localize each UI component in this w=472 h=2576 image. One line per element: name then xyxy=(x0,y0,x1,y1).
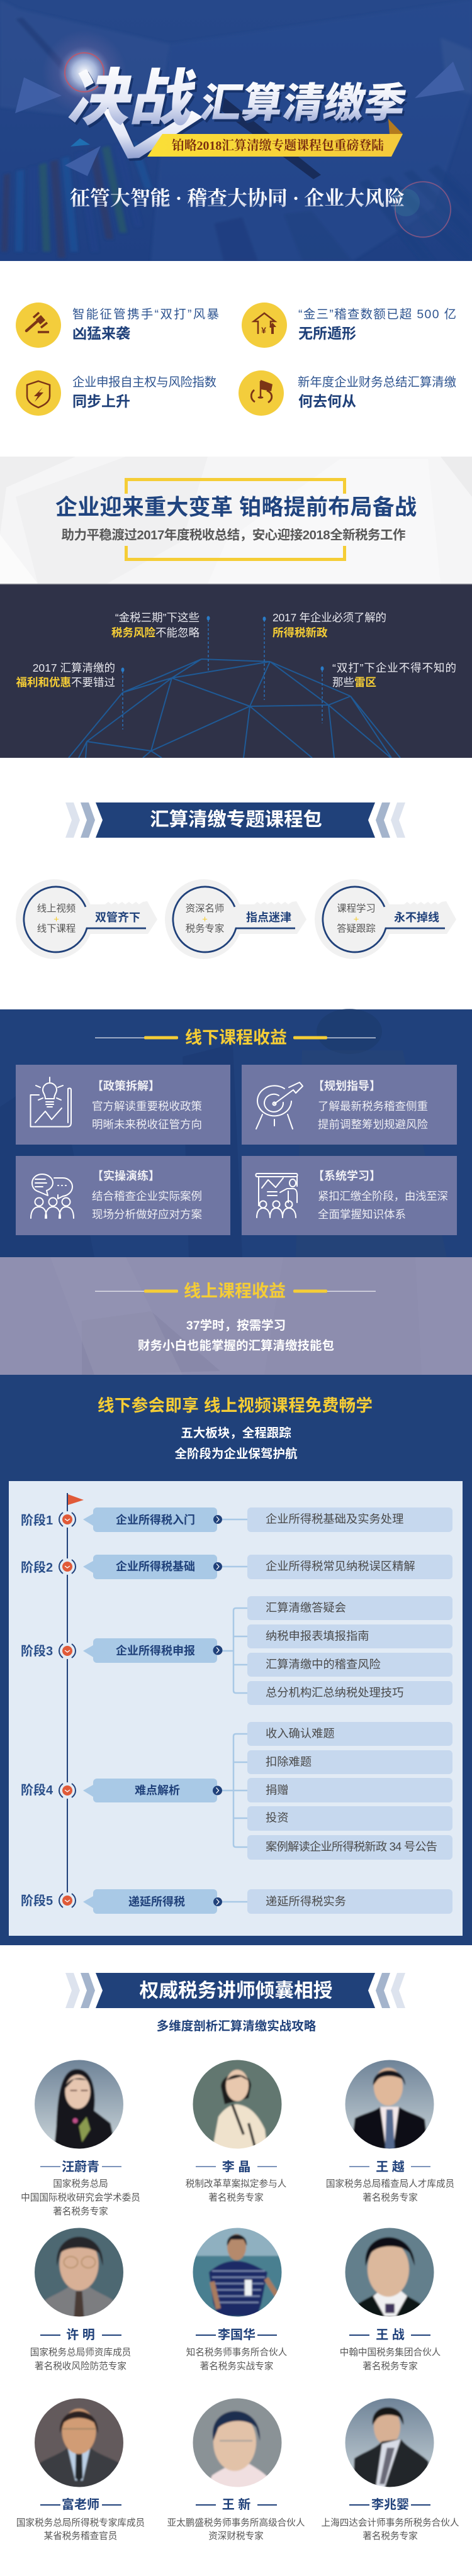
name: 李国华: 李国华 xyxy=(218,2328,256,2342)
lecturer: 富老师 xyxy=(16,2396,145,2541)
lecturer: 王战: 中翰中国税务集团合伙人 xyxy=(340,2347,441,2358)
panel: online course benefits: 财务小白也能掌握的汇算清缴技能包 xyxy=(138,1338,334,1353)
portrait xyxy=(193,2060,282,2148)
ribbon subtitle: 铂略2018汇算清缴专题课程包重磅登陆 xyxy=(172,138,384,153)
timeline xyxy=(67,1493,84,1894)
stage 3 xyxy=(21,1596,452,1705)
key: online and offline: 线上视频 xyxy=(37,903,76,914)
lecturer: 王战: 著名税务专家 xyxy=(362,2361,418,2372)
icon: target xyxy=(256,1082,303,1129)
name: 许明 xyxy=(40,2328,121,2342)
callout: golden tax risks: “金税三期”下这些 xyxy=(115,611,199,624)
callout: benefits xyxy=(16,662,125,730)
decorative triangles xyxy=(415,62,464,98)
hero tagline: 征管大智能 · 稽查大协同 · 企业大风险 xyxy=(70,187,405,209)
heading: lecturers banner xyxy=(65,1973,405,2008)
name: 王越 xyxy=(349,2160,430,2174)
name: 汪蔚青 xyxy=(40,2160,121,2174)
panel: course package keys xyxy=(16,879,456,959)
lecturer: 李兆婴: 著名税务专家 xyxy=(362,2531,418,2541)
key: teachers and experts: 税务专家 xyxy=(186,923,224,935)
icon: discussion xyxy=(31,1174,74,1218)
key: study and support: 永不掉线 xyxy=(394,911,439,924)
curriculum heading: 全阶段为企业保驾护航 xyxy=(174,1446,298,1461)
callout: new policy xyxy=(263,611,386,700)
callout: golden tax risks xyxy=(111,611,210,671)
check mark stroke xyxy=(103,107,203,158)
card: practice: 【实操演练】 xyxy=(92,1169,160,1182)
heading: course package banner xyxy=(65,802,405,838)
heading: course package banner: 汇算清缴专题课程包 xyxy=(150,809,322,830)
name: 李国华 xyxy=(196,2328,277,2342)
lecturer: 汪蔚青: 国家税务总局 xyxy=(53,2179,108,2189)
lecturer: 王战 xyxy=(340,2225,441,2372)
stage 5: 递延所得税实务 xyxy=(266,1894,346,1908)
name: 王新 xyxy=(196,2497,277,2512)
key: teachers and experts: + xyxy=(202,914,208,924)
lecturer: 王越 xyxy=(326,2057,454,2203)
panel: lecturers xyxy=(16,2057,459,2541)
name: 汪蔚青: 汪蔚青 xyxy=(62,2160,99,2174)
lecturer: 汪蔚青: 著名税务专家 xyxy=(53,2206,108,2217)
stage 5 xyxy=(21,1889,452,1914)
panel: network dark section xyxy=(0,584,472,758)
lecturer: 李晶: 著名税务专家 xyxy=(208,2192,264,2203)
icon: rising arrow xyxy=(242,303,287,348)
ribbon subtitle xyxy=(147,119,403,157)
point: golden tax xyxy=(242,303,456,348)
stage 4: 扣除难题 xyxy=(266,1755,312,1768)
panel: major change statement: 企业迎来重大变革 铂略提前布局备战 xyxy=(55,496,417,519)
callout: new policy: 2017 年企业必须了解的 xyxy=(273,611,386,624)
stage 4: 案例解读企业所得税新政 34 号公告 xyxy=(266,1840,437,1853)
stage 3: 总分机构汇总纳税处理技巧 xyxy=(266,1685,403,1699)
name: 许明: 许 明 xyxy=(66,2328,95,2342)
panel: major change statement xyxy=(0,457,472,584)
icon: presentation xyxy=(256,1174,297,1218)
portrait xyxy=(193,2399,282,2487)
lecturer: 王越: 国家税务总局稽查局人才库成员 xyxy=(326,2179,454,2189)
callout: minefields xyxy=(321,662,456,723)
lecturer: 李国华 xyxy=(186,2225,288,2372)
card: planning: 了解最新税务稽查侧重 xyxy=(318,1100,428,1113)
node xyxy=(59,1892,76,1909)
card: planning: 【规划指导】 xyxy=(313,1079,381,1092)
stage 3: 纳税申报表填报指南 xyxy=(266,1629,369,1643)
lecturer: 李晶 xyxy=(186,2057,287,2203)
icon: rising arrow: ¥ xyxy=(261,325,266,335)
stage 3: 汇算清缴中的稽查风险 xyxy=(266,1658,381,1670)
lecturer: 王新: 亚太鹏盛税务师事务所高级合伙人 xyxy=(167,2518,305,2528)
lecturer: 李兆婴 xyxy=(322,2396,459,2541)
pen xyxy=(208,94,321,179)
point: new year summary: 新年度企业财务总结汇算清缴 xyxy=(298,375,456,389)
point: new year summary xyxy=(239,370,456,416)
lecturer: 李国华: 知名税务师事务所合伙人 xyxy=(186,2347,288,2358)
card: policy: 官方解读重要税收政策 xyxy=(92,1100,202,1113)
lecturer: 李兆婴: 上海四达会计师事务所税务合伙人 xyxy=(322,2518,459,2528)
lecturer: 李国华: 著名税务实战专家 xyxy=(200,2361,274,2372)
stage 5: 递延所得税 xyxy=(128,1895,185,1908)
panel: hero banner xyxy=(0,0,472,261)
panel: online course benefits xyxy=(0,1257,472,1375)
stage 2: 阶段2 xyxy=(21,1560,53,1575)
node xyxy=(59,1511,76,1528)
name: 王战 xyxy=(349,2328,430,2342)
curriculum heading xyxy=(98,1396,373,1461)
card: policy: 【政策拆解】 xyxy=(92,1080,160,1092)
callout: golden tax risks: 税务风险不能忽略 xyxy=(111,626,199,639)
card: planning: 提前调整筹划规避风险 xyxy=(318,1118,428,1131)
name: 王新: 王 新 xyxy=(222,2497,250,2512)
icon: gavel xyxy=(16,303,61,348)
lecturer: 富老师: 国家税务总局所得税专家库成员 xyxy=(16,2518,145,2528)
stage 1: 企业所得税基础及实务处理 xyxy=(266,1512,403,1526)
point: dual strike: 智能征管携手“双打”风暴 xyxy=(72,308,219,321)
lecturers subheading: 多维度剖析汇算清缴实战攻略 xyxy=(157,2019,317,2033)
node xyxy=(59,1782,76,1799)
card: system learning: 【系统学习】 xyxy=(313,1169,381,1182)
lecturer: 王新 xyxy=(167,2396,305,2541)
callout: benefits: 福利和优惠不要错过 xyxy=(16,676,115,689)
portrait xyxy=(345,2399,434,2487)
point: self declaration: 同步上升 xyxy=(72,393,130,409)
card: policy xyxy=(16,1065,230,1145)
node xyxy=(59,1643,76,1659)
stage 2 xyxy=(21,1555,452,1579)
heading: online benefits: 线上课程收益 xyxy=(184,1282,286,1301)
heading: online benefits xyxy=(95,1282,376,1301)
lecturer: 汪蔚青: 中国国际税收研究会学术委员 xyxy=(21,2192,140,2203)
point: new year summary: 何去何从 xyxy=(298,393,356,409)
key: study and support: + xyxy=(354,914,359,924)
point: self declaration: 企业申报自主权与风险指数 xyxy=(72,375,216,389)
name: 李晶: 李 晶 xyxy=(222,2160,250,2174)
icon: flag and arrows xyxy=(239,370,284,416)
lecturer: 许明: 国家税务总局师资库成员 xyxy=(30,2347,131,2358)
stage 4: 难点解析 xyxy=(135,1784,180,1797)
card: practice xyxy=(16,1156,230,1235)
stage 4 xyxy=(21,1722,452,1860)
key: study and support: 课程学习 xyxy=(337,903,376,914)
portrait xyxy=(35,2060,123,2148)
portrait xyxy=(35,2228,123,2317)
curriculum heading: 五大板块，全程跟踪 xyxy=(181,1426,291,1440)
stage 4: 捐赠 xyxy=(266,1784,289,1796)
stage 1 xyxy=(21,1507,452,1532)
panel: four key points xyxy=(16,303,456,416)
node xyxy=(59,1558,76,1575)
lens flare xyxy=(42,30,127,115)
point: dual strike xyxy=(16,303,219,348)
portrait xyxy=(35,2399,123,2487)
hero title: 汇算清缴季 xyxy=(198,80,410,126)
stage 2: 企业所得税基础 xyxy=(116,1560,195,1573)
stage 4: 投资 xyxy=(266,1811,289,1824)
portrait xyxy=(193,2228,282,2317)
name: 李兆婴: 李兆婴 xyxy=(371,2497,409,2512)
name: 李晶 xyxy=(196,2160,277,2174)
card: system learning xyxy=(242,1156,457,1235)
key: online and offline xyxy=(16,879,157,959)
network sphere xyxy=(69,659,400,758)
callout: benefits: 2017 汇算清缴的 xyxy=(33,662,115,674)
callout: minefields: 那些雷区 xyxy=(332,676,376,689)
point: dual strike: 凶猛来袭 xyxy=(72,325,130,341)
stage 3: 企业所得税申报 xyxy=(116,1644,195,1657)
lecturer: 许明 xyxy=(30,2225,131,2372)
key: study and support xyxy=(315,879,456,959)
point: golden tax: “金三”稽查数额已超 500 亿 xyxy=(298,308,456,321)
card: practice: 现场分析做好应对方案 xyxy=(92,1208,202,1221)
stage 3: 汇算清缴答疑会 xyxy=(266,1601,346,1614)
stage 3: 阶段3 xyxy=(21,1643,53,1658)
lecturer: 王越: 著名税务专家 xyxy=(362,2192,418,2203)
panel: online course benefits: 37学时，按需学习 xyxy=(186,1318,286,1333)
hero title xyxy=(64,64,410,158)
heading: offline benefits xyxy=(95,1028,376,1047)
name: 李兆婴 xyxy=(349,2497,430,2512)
heading: lecturers banner: 权威税务讲师倾囊相授 xyxy=(140,1980,332,2001)
lecturer: 李晶: 税制改革草案拟定参与人 xyxy=(186,2178,287,2189)
name: 富老师 xyxy=(40,2497,121,2512)
stage 4: 收入确认难题 xyxy=(266,1727,335,1740)
point: golden tax: 无所遁形 xyxy=(298,325,356,341)
portrait xyxy=(345,2060,434,2148)
key: online and offline: + xyxy=(53,914,59,924)
lecturer: 富老师: 某省税务稽查官员 xyxy=(44,2531,117,2541)
lecturer: 许明: 著名税收风险防范专家 xyxy=(35,2361,126,2372)
yellow bracket xyxy=(126,479,345,560)
key: study and support: 答疑跟踪 xyxy=(337,923,376,935)
hero title: 决战 xyxy=(64,64,202,133)
stage 1: 阶段1 xyxy=(21,1513,53,1528)
panel: offline course benefits xyxy=(0,1009,472,1257)
heading: offline benefits: 线下课程收益 xyxy=(185,1028,287,1047)
name: 王越: 王 越 xyxy=(376,2160,405,2174)
icon: shield xyxy=(16,370,61,416)
card: system learning: 紧扣汇缴全阶段，由浅至深 xyxy=(318,1190,448,1202)
key: teachers and experts: 指点迷津 xyxy=(246,911,291,924)
card: planning xyxy=(242,1065,457,1145)
panel: five stage curriculum xyxy=(0,1375,472,1945)
name: 富老师: 富老师 xyxy=(62,2497,99,2512)
key: teachers and experts: 资深名师 xyxy=(186,903,224,914)
key: online and offline: 双管齐下 xyxy=(95,911,140,924)
card: system learning: 全面掌握知识体系 xyxy=(318,1208,406,1221)
stage 4: 阶段4 xyxy=(21,1782,53,1797)
stage 1: 企业所得税入门 xyxy=(116,1513,195,1526)
curriculum heading: 线下参会即享 线上视频课程免费畅学 xyxy=(98,1396,373,1415)
panel: major change statement: 助力平稳渡过2017年度税收总结，安心迎接2018全新税务工作 xyxy=(62,527,405,542)
lecturer: 王新: 资深财税专家 xyxy=(208,2531,264,2541)
icon: bulb and chart xyxy=(30,1077,71,1127)
callout: minefields: “双打”下企业不得不知的 xyxy=(332,662,456,674)
name: 王战: 王 战 xyxy=(376,2328,405,2342)
card: policy: 明晰未来税收征管方向 xyxy=(92,1118,202,1131)
key: online and offline: 线下课程 xyxy=(37,923,76,935)
stage 5: 阶段5 xyxy=(21,1893,53,1908)
key: teachers and experts xyxy=(165,879,306,959)
callout: new policy: 所得税新政 xyxy=(273,626,328,639)
stage 2: 企业所得税常见纳税误区精解 xyxy=(266,1560,415,1572)
point: self declaration xyxy=(16,370,216,416)
portrait xyxy=(345,2228,434,2317)
card: practice: 结合稽查企业实际案例 xyxy=(92,1190,202,1202)
lecturer: 汪蔚青 xyxy=(21,2057,140,2217)
